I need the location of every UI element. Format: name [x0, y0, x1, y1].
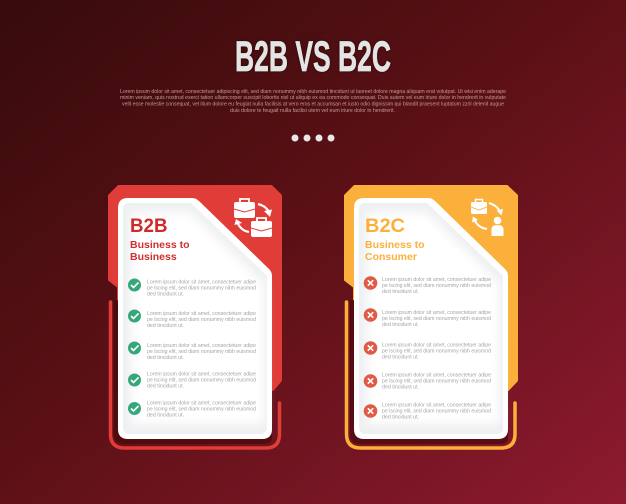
list item 3: pe lscing elit, sed diam nonummy nibh euismod: [382, 349, 491, 355]
list item 1: pe lscing elit, sed diam nonummy nibh euismod: [382, 283, 491, 289]
red outline frame: [110, 302, 280, 448]
list item 4: pe lscing elit, sed diam nonummy nibh euismod: [147, 378, 256, 384]
icon: briefcase exchange: [234, 199, 272, 237]
orange outline frame: [346, 302, 515, 448]
list item 3: ded tincidunt ut.: [147, 355, 184, 361]
inner shading: [123, 203, 267, 434]
inner highlight: [131, 212, 264, 424]
inner shading: [359, 203, 503, 434]
intro paragraph: [120, 89, 506, 114]
subheading: Business: [130, 251, 177, 263]
list item 4: ded tincidunt ut.: [147, 384, 184, 390]
intro paragraph: velit esse molestie consequat, vel illum dolore eu feugiat nulla facilisis at vero eros et accumsan et iusto odio dignissim qui blandit praesent luptatum zzril delenit augue: [122, 102, 504, 108]
list item 4: ded tincidunt ut.: [382, 385, 419, 391]
inner highlight: [367, 212, 500, 424]
card shadow: [350, 300, 508, 444]
list item 1: ded tincidunt ut.: [382, 289, 419, 295]
intro paragraph: Lorem ipsum dolor sit amet, consectetuer adipiscing elit, sed diam nonummy nibh euismod tincidunt ut laoreet dolore magna aliquam erat volutpat. Ut wisi enim aderape: [120, 89, 506, 95]
list item 2: ded tincidunt ut.: [382, 322, 419, 328]
list item 1: [128, 278, 256, 298]
list item 5: pe lscing elit, sed diam nonummy nibh euismod: [147, 406, 256, 412]
list item 3: [364, 341, 491, 361]
list item 4: Lorem ipsum dolor sit amet, consectetuer adipe: [147, 372, 256, 378]
list item 3: Lorem ipsum dolor sit amet, consectetuer adipe: [147, 343, 256, 349]
list item 3: ded tincidunt ut.: [382, 355, 419, 361]
intro paragraph: minim veniam, quis nostrud exerci tation ullamcorper suscipit lobortis nisl ut aliquip ex ea commodo consequat. Duis autem vel eum iriure dolor in hendrerit in vulputate: [120, 95, 506, 101]
pagination dots: [292, 134, 334, 142]
heading: B2C: B2C: [365, 215, 405, 237]
list item 1: [364, 276, 491, 295]
list item 4: [364, 372, 491, 391]
list item 4: [128, 372, 256, 390]
panel: B2B: [109, 186, 281, 448]
card shadow: [114, 300, 272, 444]
list item 5: pe lscing elit, sed diam nonummy nibh euismod: [382, 409, 491, 415]
subheading: Business to: [130, 239, 190, 251]
list item 5: [364, 402, 491, 421]
white card: [354, 198, 508, 439]
red backing shape: [109, 186, 281, 390]
list item 4: pe lscing elit, sed diam nonummy nibh euismod: [382, 379, 491, 385]
list item 5: Lorem ipsum dolor sit amet, consectetuer adipe: [382, 402, 491, 408]
white card: [118, 198, 272, 439]
list item 2: ded tincidunt ut.: [147, 323, 184, 329]
list item 1: Lorem ipsum dolor sit amet, consectetuer adipe: [147, 280, 256, 286]
title: B2B VS B2C: [235, 33, 391, 81]
list item 2: [128, 310, 256, 329]
list item 5: ded tincidunt ut.: [382, 415, 419, 421]
subheading: [130, 239, 190, 263]
list item 1: ded tincidunt ut.: [147, 292, 184, 298]
list item 3: Lorem ipsum dolor sit amet, consectetuer adipe: [382, 342, 491, 348]
list item 2: [364, 308, 491, 328]
intro paragraph: duis dolore te feugait nulla facilisi utem vel eum iriure dolor in hendrerit.: [230, 108, 395, 114]
list item 5: ded tincidunt ut.: [147, 412, 184, 418]
orange backing shape: [345, 186, 517, 390]
subheading: Consumer: [365, 251, 417, 263]
list item 5: Lorem ipsum dolor sit amet, consectetuer adipe: [147, 400, 256, 406]
icon: briefcase to person: [471, 200, 504, 236]
list item 2: Lorem ipsum dolor sit amet, consectetuer adipe: [147, 311, 256, 317]
list item 5: [128, 400, 256, 418]
list item 3: pe lscing elit, sed diam nonummy nibh euismod: [147, 349, 256, 355]
list item 2: pe lscing elit, sed diam nonummy nibh euismod: [382, 316, 491, 322]
subheading: Business to: [365, 239, 425, 251]
list item 1: Lorem ipsum dolor sit amet, consectetuer adipe: [382, 277, 491, 283]
list item 1: pe lscing elit, sed diam nonummy nibh euismod: [147, 286, 256, 292]
subheading: [365, 239, 425, 263]
list item 2: pe lscing elit, sed diam nonummy nibh euismod: [147, 317, 256, 323]
panel: B2C: [345, 186, 517, 448]
list item 2: Lorem ipsum dolor sit amet, consectetuer adipe: [382, 310, 491, 316]
heading: B2B: B2B: [130, 215, 168, 237]
list item 3: [128, 342, 256, 361]
list item 4: Lorem ipsum dolor sit amet, consectetuer adipe: [382, 372, 491, 378]
